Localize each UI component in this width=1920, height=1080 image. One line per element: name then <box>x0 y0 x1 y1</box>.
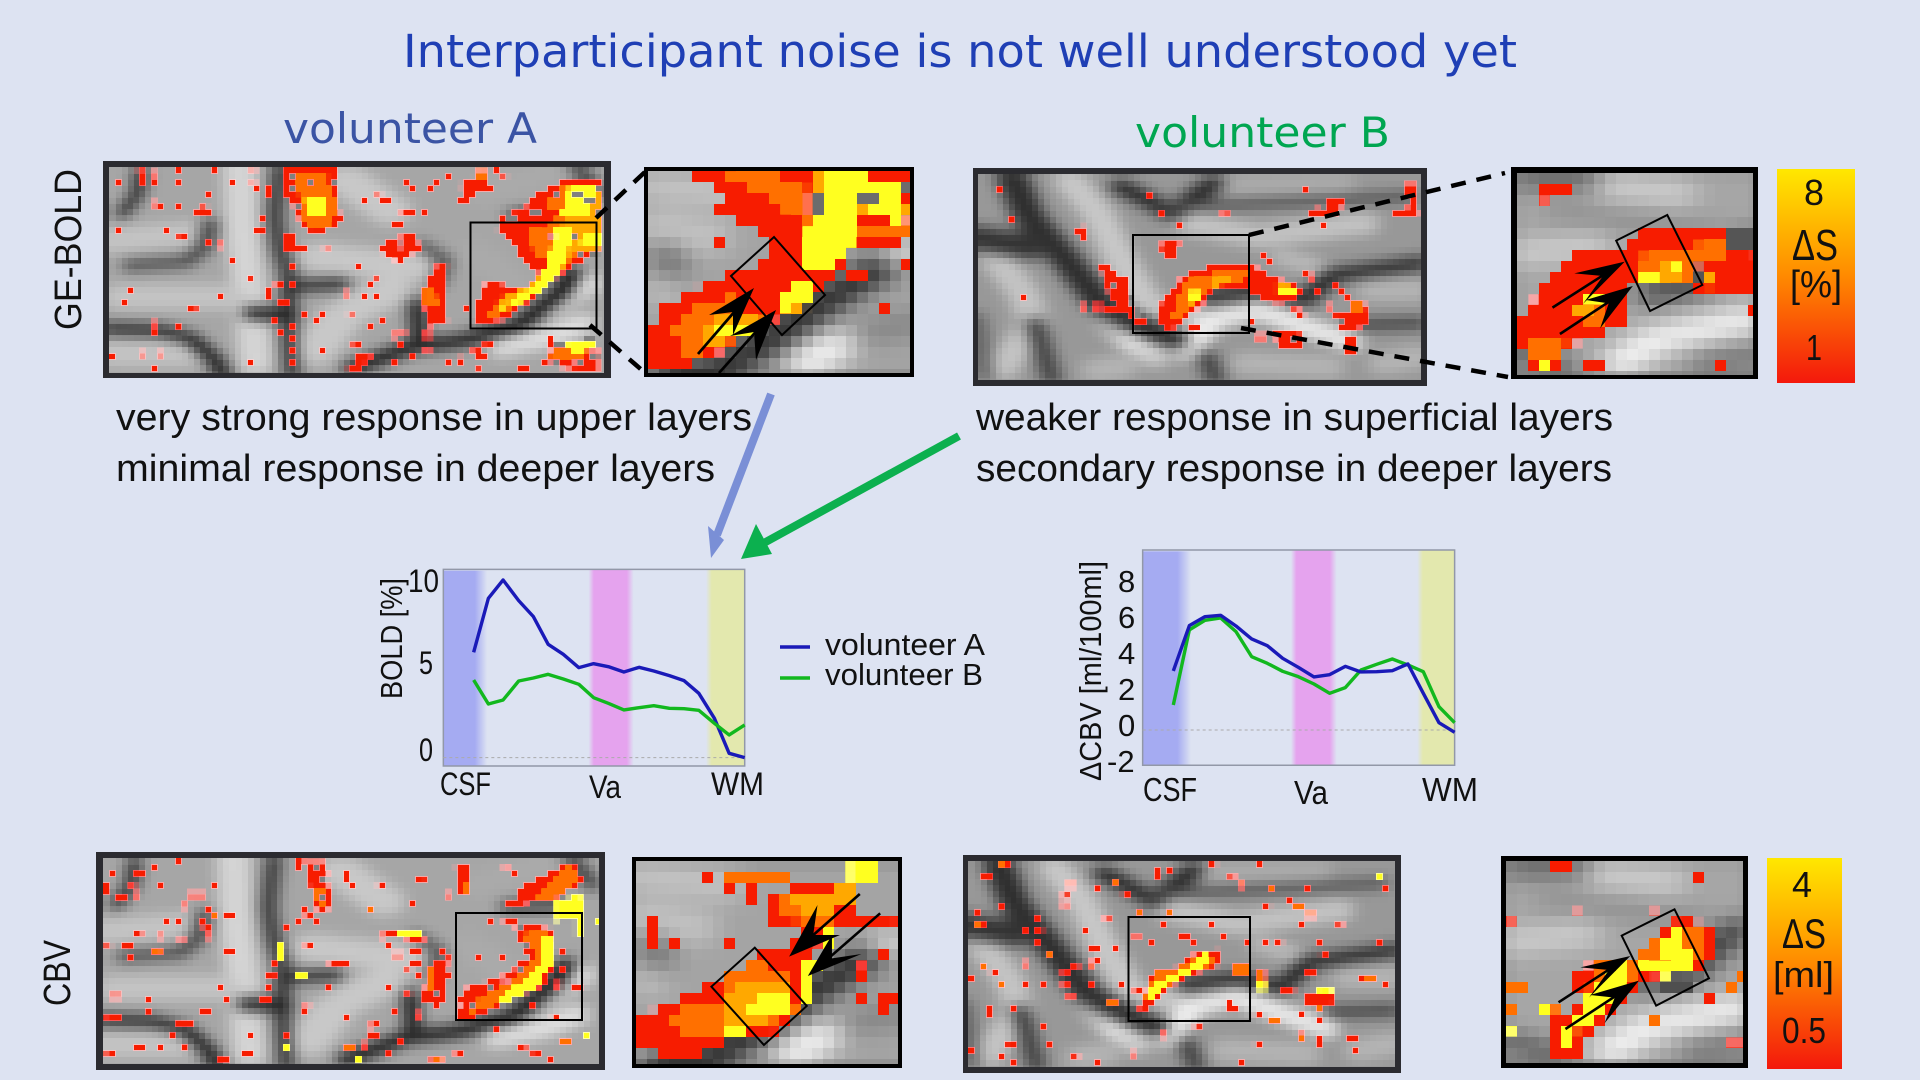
inset marker box <box>456 913 582 1020</box>
colorbar label <box>1790 221 1842 368</box>
colorbar label: ΔS <box>1792 221 1838 270</box>
shaded bands <box>443 569 745 766</box>
y axis labels: 6 <box>1118 600 1135 635</box>
x axis labels: WM <box>1422 771 1478 808</box>
y axis labels: 10 <box>408 563 439 599</box>
panel: volunteer B GE-BOLD map <box>937 137 1511 403</box>
legend: volunteer B <box>825 657 983 692</box>
y axis title: BOLD [%] <box>374 578 409 699</box>
text: volunteer B description <box>975 397 1613 490</box>
icon: arrows <box>1552 262 1633 334</box>
heading: volunteer A: volunteer A <box>283 104 537 153</box>
dashed zoom connectors A <box>590 171 646 372</box>
legend: volunteer A <box>825 627 985 662</box>
inset marker box <box>1133 235 1249 333</box>
icon: arrows <box>698 288 776 373</box>
y axis labels: 5 <box>419 645 433 681</box>
y axis labels <box>408 563 439 768</box>
heading: volunteer B: volunteer B <box>1135 108 1390 157</box>
text: volunteer A description: very strong response in upper layers <box>116 397 752 439</box>
y axis labels: 4 <box>1118 636 1135 671</box>
y axis labels: 2 <box>1118 672 1135 707</box>
text: volunteer A description: minimal response in deeper layers <box>116 448 715 490</box>
shaded bands <box>1143 550 1455 765</box>
text: volunteer B description: weaker response in superficial layers <box>975 397 1613 439</box>
diamond region of interest <box>731 237 825 335</box>
colorbar max value: 4 <box>1792 864 1812 905</box>
x axis labels: WM <box>711 766 764 802</box>
panel: volunteer A CBV zoom <box>612 851 923 1077</box>
y axis labels <box>1107 564 1135 779</box>
x axis labels: Va <box>1294 774 1329 811</box>
colorbar label: [%] <box>1790 264 1842 306</box>
line: volunteer B <box>474 674 745 735</box>
panel: volunteer A CBV map <box>62 828 652 1080</box>
text: volunteer A description <box>116 397 752 490</box>
y axis labels: 8 <box>1118 564 1135 599</box>
rectangle region of interest <box>1622 909 1709 1006</box>
colorbar label: ΔS <box>1782 910 1826 957</box>
colorbar label: 1 <box>1806 327 1822 368</box>
x axis labels: CSF <box>1143 771 1197 808</box>
diamond region of interest <box>711 948 807 1045</box>
colorbar max value: 8 <box>1804 172 1824 213</box>
text: volunteer B description: secondary response in deeper layers <box>976 448 1612 490</box>
line: volunteer A <box>1173 615 1455 732</box>
y axis labels: 0 <box>419 732 433 768</box>
colorbar CBV <box>1767 858 1842 1069</box>
panel: volunteer B CBV zoom <box>1490 848 1765 1075</box>
line: volunteer A <box>474 580 745 758</box>
panel: volunteer B CBV map <box>926 824 1483 1080</box>
dashed zoom connectors B <box>1241 173 1508 377</box>
y axis labels: -2 <box>1107 744 1135 779</box>
panel: volunteer B GE-BOLD zoom <box>1500 160 1775 386</box>
colorbar GE-BOLD <box>1777 169 1855 383</box>
x axis labels <box>440 766 764 805</box>
x axis labels: CSF <box>440 766 491 802</box>
chart: CBV profile <box>1073 550 1478 811</box>
colorbar label <box>1773 910 1834 1051</box>
chart: BOLD profile <box>374 563 764 805</box>
icon: arrows <box>789 894 880 976</box>
colorbar label: [ml] <box>1773 954 1834 995</box>
row label: CBV: CBV <box>37 939 79 1006</box>
x axis labels: Va <box>589 769 621 805</box>
panel: volunteer A GE-BOLD zoom <box>626 160 936 387</box>
y axis labels: 0 <box>1118 708 1135 743</box>
inset marker box <box>470 222 596 328</box>
arrow: green to chart <box>741 436 959 559</box>
x axis labels <box>1143 771 1478 811</box>
row label: GE-BOLD: GE-BOLD <box>48 169 90 330</box>
line: volunteer B <box>1173 618 1455 723</box>
y axis title: ΔCBV [ml/100ml] <box>1073 561 1108 781</box>
icon: arrows <box>1559 956 1639 1029</box>
rectangle region of interest <box>1616 215 1702 311</box>
inset marker box <box>1128 917 1250 1021</box>
title: Interparticipant noise is not well understood yet <box>403 25 1517 78</box>
legend <box>780 627 985 692</box>
arrow: blue to chart <box>708 394 771 558</box>
panel: volunteer A GE-BOLD map <box>68 137 658 404</box>
colorbar label: 0.5 <box>1782 1010 1826 1051</box>
